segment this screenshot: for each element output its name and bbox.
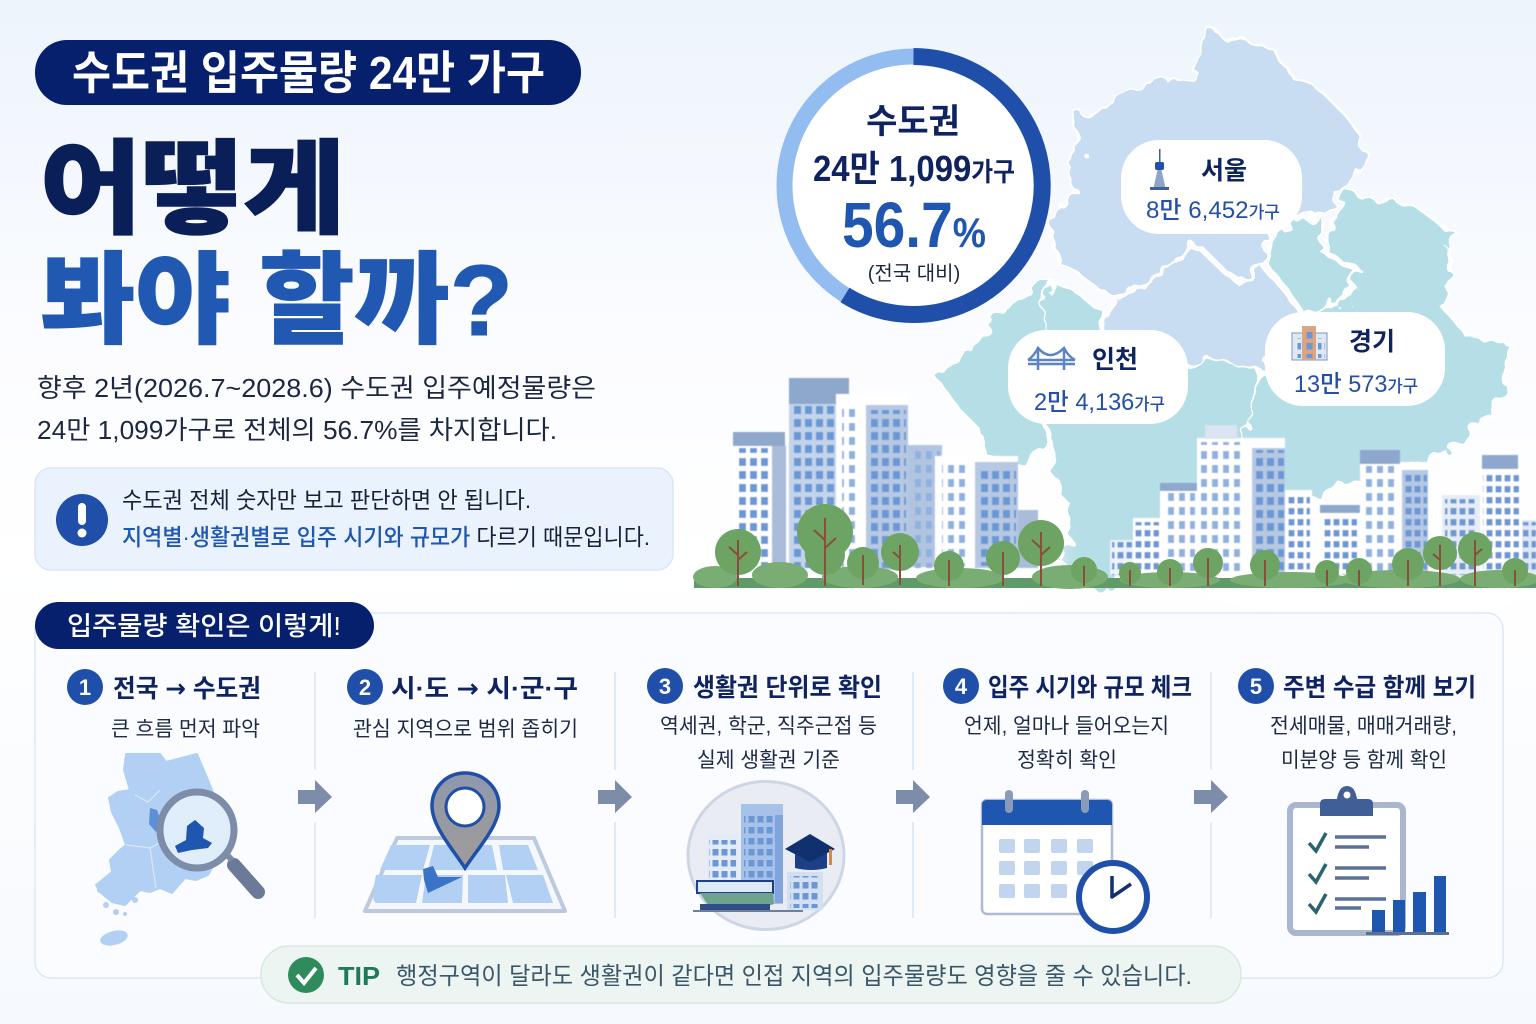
label: Gyeonggi: 경기 [1349,328,1395,356]
icon: map pin [365,773,565,911]
label: Gyeonggi: 13만 573가구 [1294,371,1418,398]
step 1: 큰 흐름 먼저 파악 [111,718,260,741]
arrow 4 [1194,780,1228,813]
headline: 어떻게 [40,133,345,247]
intro text [37,373,596,445]
tip bar: 행정구역이 달라도 생활권이 같다면 인접 지역의 입주물량도 영향을 줄 수 있습니다. [396,963,1192,990]
intro text: 24만 1,099가구로 전체의 56.7%를 차지합니다. [37,415,557,445]
step 1: 전국 → 수도권 [113,674,261,703]
step 4 [943,668,1192,931]
icon: clipboard with bars [1290,786,1449,935]
icon: building [1292,326,1327,360]
step 3: 실제 생활권 기준 [697,749,840,772]
step 5: 미분양 등 함께 확인 [1281,749,1447,772]
label: Incheon [1008,330,1188,424]
label: Seoul: 8만 6,452가구 [1146,197,1280,224]
label: Seoul: 서울 [1201,157,1247,185]
donut chart: 24만 1,099가구 [813,148,1015,189]
step 2 [347,669,578,911]
icon: neighbourhood circle [688,782,844,930]
step 2: 관심 지역으로 범위 좁히기 [353,718,578,741]
icon: Korea map with magnifier [96,754,258,948]
step 5: 주변 수급 함께 보기 [1283,674,1476,702]
arrow 3 [896,780,930,813]
headline [40,133,513,357]
step 2: 2 [359,675,371,700]
arrow 1 [298,780,332,813]
callout: 수도권 전체 숫자만 보고 판단하면 안 됩니다. [122,487,531,513]
icon: tower [1150,149,1169,190]
apartment buildings left [733,378,1038,570]
label: Incheon: 2만 4,136가구 [1034,389,1165,416]
step 3: 3 [659,674,671,699]
tip bar: TIP [338,961,380,991]
label: Incheon: 인천 [1092,346,1138,374]
headline: 봐야 할까? [40,245,513,357]
panel: how to check [35,602,1503,978]
step 4: 4 [955,674,968,699]
step 5 [1238,668,1476,935]
callout: 지역별·생활권별로 입주 시기와 규모가 다르기 때문입니다. [122,524,650,550]
icon: train [693,881,803,912]
step 4: 입주 시기와 규모 체크 [988,674,1192,702]
tip bar [261,946,1241,1003]
icon: exclamation [56,494,108,546]
step 4: 언제, 얼마나 들어오는지 [964,715,1169,738]
step 4: 정확히 확인 [1017,749,1117,772]
apartment buildings right [1110,425,1536,576]
panel heading: 입주물량 확인은 이렇게! [67,611,341,641]
panel heading [35,602,374,649]
arrow 2 [598,780,632,813]
icon: graduation cap [785,834,835,870]
donut chart: 56.7% [842,189,986,261]
trees and ground [693,504,1536,589]
step 5: 전세매물, 매매거래량, [1270,715,1457,738]
step 1 [67,669,261,948]
map of capital area [855,30,1536,625]
step 3: 역세권, 학군, 직주근접 등 [660,715,877,738]
title pill: 수도권 입주물량 24만 가구 [72,47,545,99]
icon: calendar and clock [982,790,1147,931]
icon: bridge [1028,348,1075,370]
step 3 [647,668,882,930]
step 2: 시·도 → 시·군·구 [391,674,578,703]
step 5: 5 [1250,674,1262,699]
step 3: 생활권 단위로 확인 [693,674,882,702]
step 1: 1 [79,675,91,700]
intro text: 향후 2년(2026.7~2028.6) 수도권 입주예정물량은 [37,373,596,403]
donut chart: (전국 대비) [868,262,960,285]
label: Gyeonggi [1265,312,1445,406]
label: Seoul [1121,140,1302,234]
donut chart: 수도권 [866,103,960,141]
icon: check [288,957,324,993]
donut chart [776,48,1050,322]
callout [35,468,673,570]
